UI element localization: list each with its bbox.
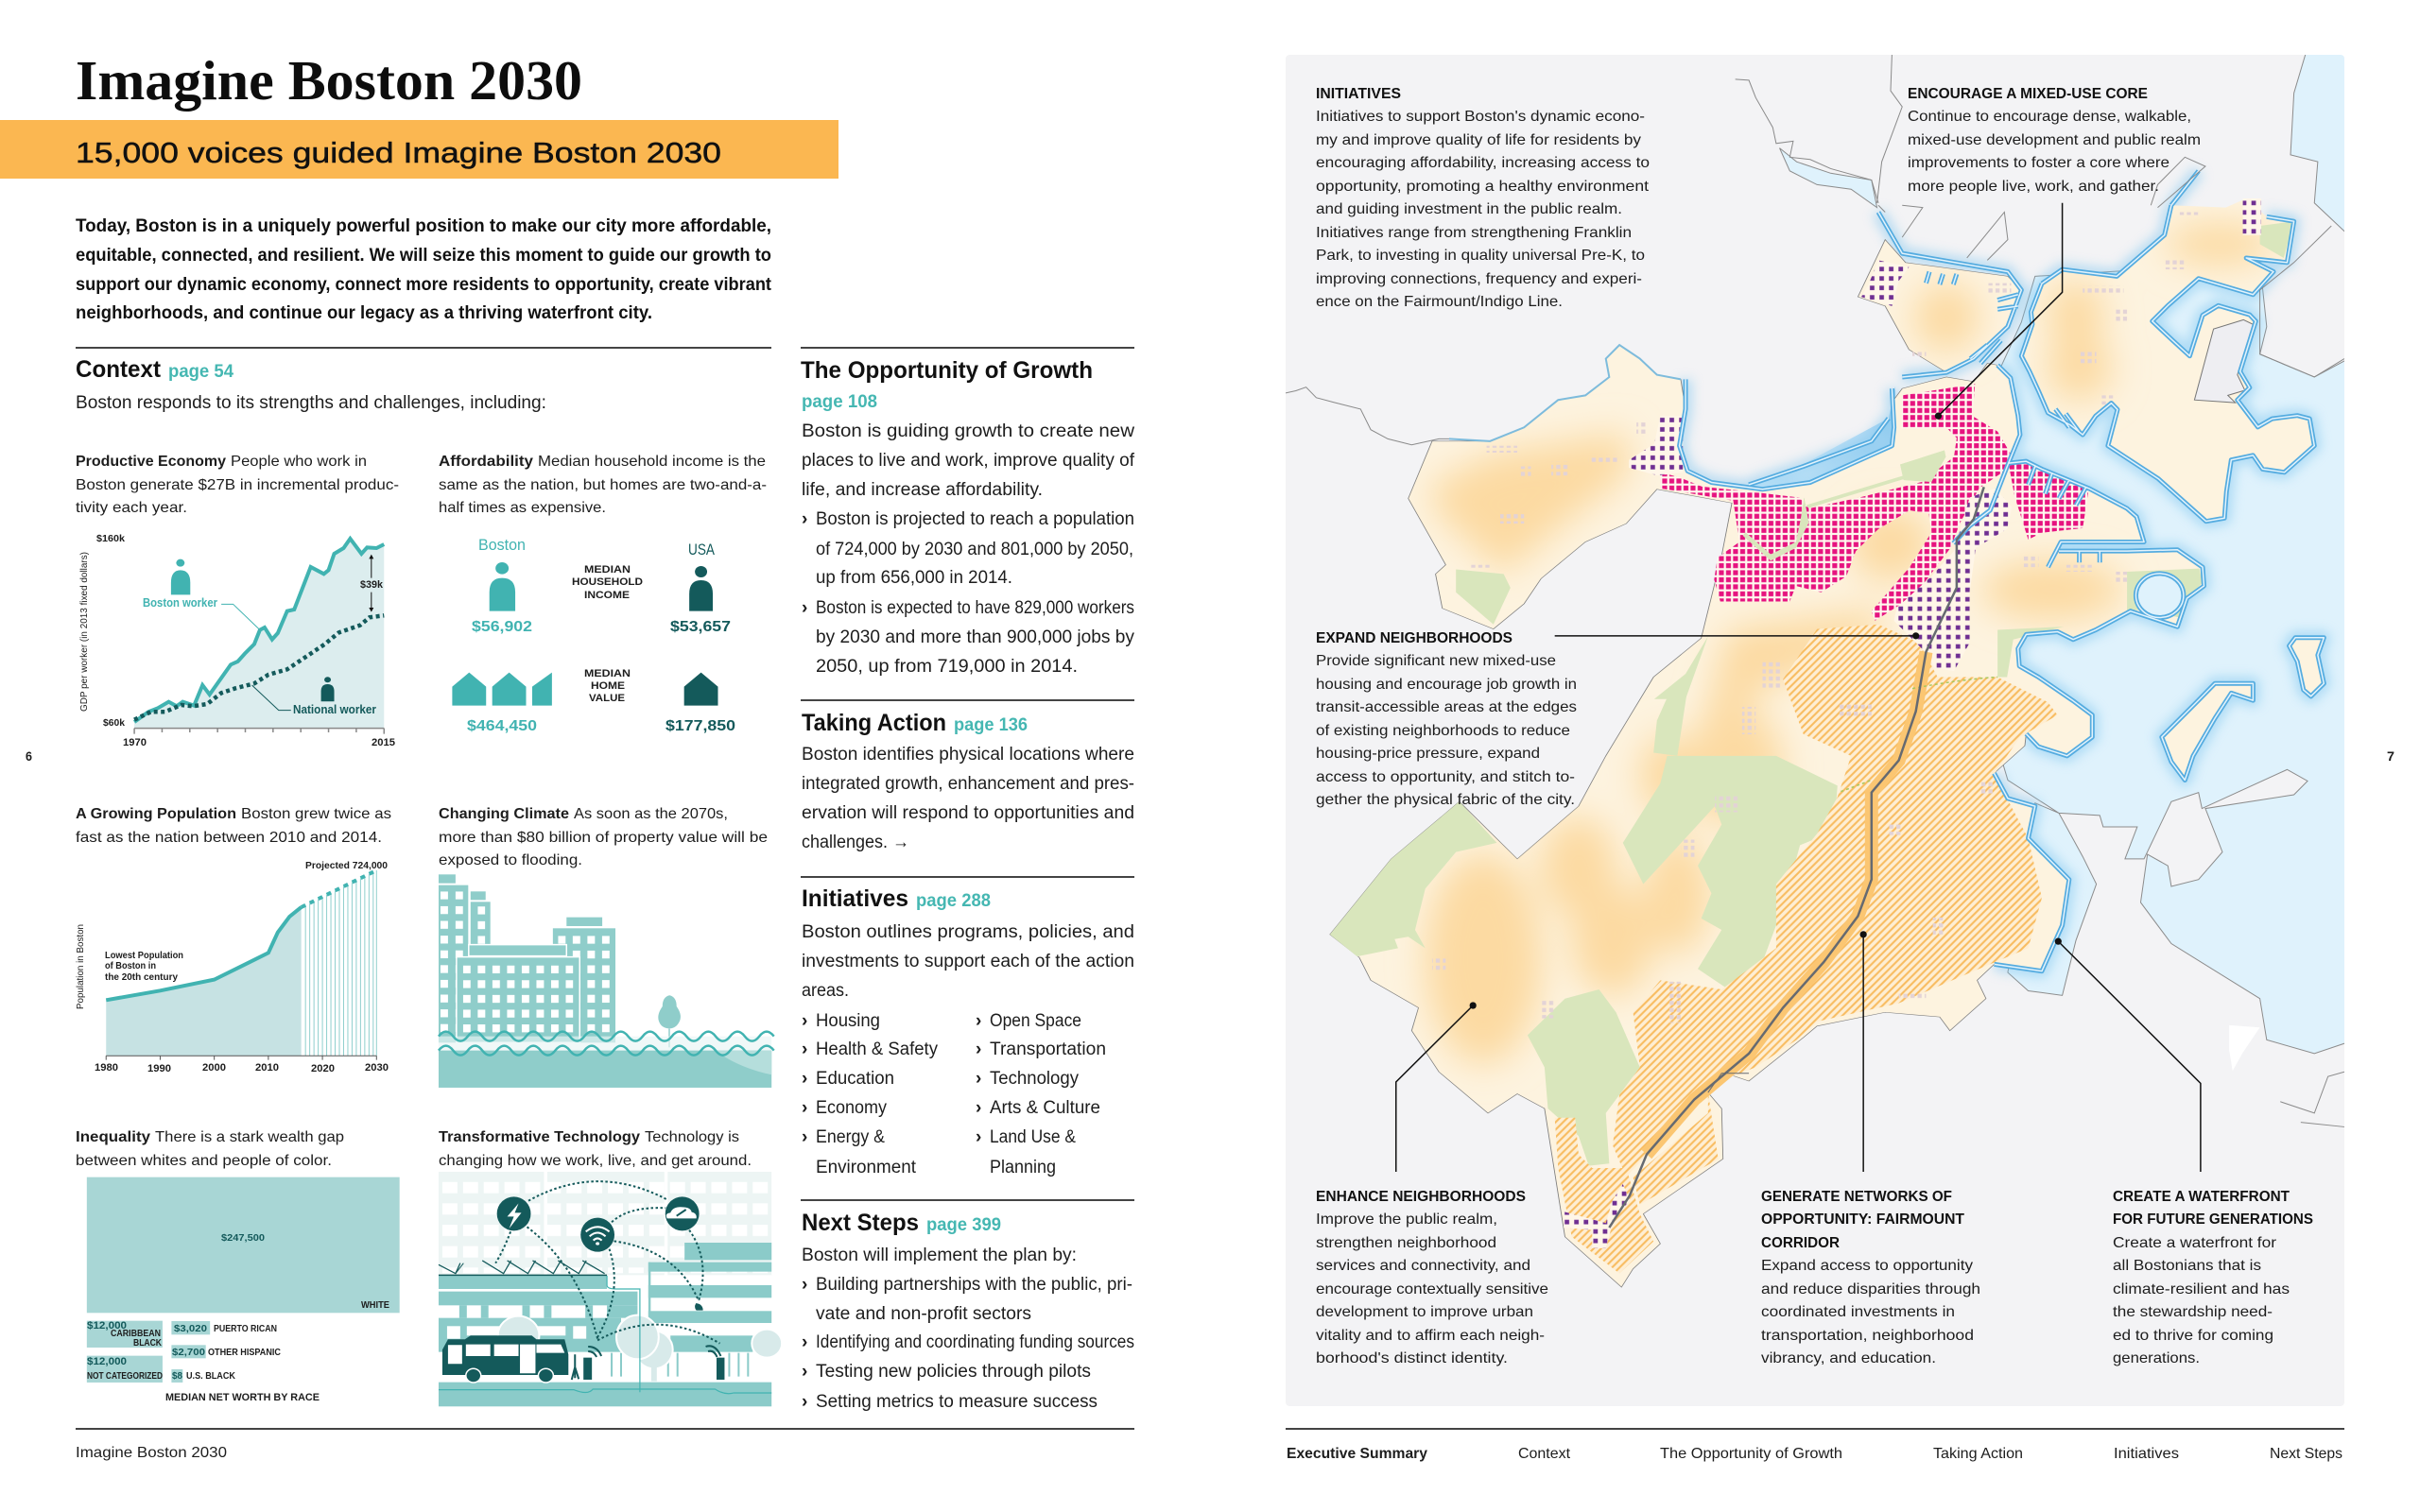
treemap: median net worth by race: WHITE	[361, 1300, 389, 1311]
area chart: population: of Boston in	[105, 961, 156, 971]
column: initiatives: ›	[976, 1011, 981, 1031]
column: initiatives: ›	[976, 1098, 981, 1118]
text: expand neighborhoods: housing and encourage job growth in	[1316, 677, 1577, 693]
text: create a waterfront: the stewardship need-	[2113, 1304, 2273, 1320]
affordability comparison graphic: Boston	[478, 536, 526, 554]
treemap: median net worth by race	[87, 1177, 400, 1403]
footer navigation right: Taking Action	[1933, 1446, 2023, 1462]
column: initiatives	[802, 885, 1134, 1177]
text: changing climate: exposed to flooding.	[439, 852, 582, 868]
column: next steps: ›	[802, 1392, 807, 1412]
column: next steps: vate and non-profit sectors	[816, 1304, 1031, 1324]
column: next steps: ›	[802, 1275, 807, 1295]
column: the opportunity of growth: of 724,000 by 2030 and 801,000 by 2050,	[816, 540, 1133, 559]
text: create a waterfront: climate-resilient and has	[2113, 1281, 2290, 1297]
text: encourage a mixed-use core: mixed-use development and public realm	[1908, 132, 2201, 148]
line chart: GDP per worker: GDP per worker (in 2013 fixed dollars)	[79, 552, 90, 712]
text: affordability	[439, 454, 767, 516]
text: initiatives: Initiatives range from strengthening Franklin	[1316, 225, 1632, 241]
text: growing population: fast as the nation between 2010 and 2014.	[76, 830, 382, 846]
area chart: population: Population in Boston	[76, 924, 86, 1009]
affordability comparison graphic	[452, 536, 735, 734]
text: expand neighborhoods: EXPAND NEIGHBORHOODS	[1316, 630, 1512, 646]
text: expand neighborhoods	[1316, 630, 1577, 808]
footer navigation right	[1286, 1428, 2344, 1462]
affordability comparison graphic: VALUE	[589, 693, 625, 704]
panel: map of Boston	[1286, 54, 2348, 1406]
column: next steps	[802, 1210, 1134, 1412]
text: encourage a mixed-use core	[1908, 86, 2201, 195]
title: Imagine Boston 2030	[76, 49, 582, 112]
callout lines	[1396, 203, 2201, 1172]
column: initiatives: Arts & Culture	[990, 1098, 1100, 1118]
text: generate networks: Expand access to opportunity	[1761, 1258, 1973, 1274]
text: generate networks: and reduce disparities through	[1761, 1281, 1980, 1297]
area chart: population: Projected 724,000	[305, 861, 388, 871]
affordability comparison graphic: MEDIAN	[584, 564, 631, 576]
column: initiatives: ›	[802, 1098, 807, 1118]
column: taking action	[802, 710, 1134, 852]
column: initiatives: Energy &	[816, 1127, 885, 1147]
affordability comparison graphic: $53,657	[670, 619, 731, 635]
text: expand neighborhoods: access to opportunity, and stitch to-	[1316, 769, 1575, 785]
footer navigation right: Next Steps	[2270, 1446, 2342, 1462]
column: taking action: Boston identifies physical locations where	[802, 745, 1134, 765]
column: initiatives: Technology	[990, 1069, 1079, 1089]
text: create a waterfront: ed to thrive for coming	[2113, 1328, 2273, 1344]
column: next steps: page 399	[926, 1215, 1001, 1235]
column: next steps: Building partnerships with the public, pri-	[816, 1275, 1132, 1295]
heading: context: Context	[76, 356, 162, 383]
text: create a waterfront	[2113, 1189, 2313, 1366]
illustration: connected city	[439, 1172, 782, 1406]
text: generate networks: transportation, neighborhood	[1761, 1328, 1974, 1344]
text: inequality	[76, 1129, 344, 1169]
text: expand neighborhoods: transit-accessible areas at the edges	[1316, 699, 1577, 715]
area chart: population: 2020	[311, 1063, 335, 1074]
text: enhance neighborhoods: development to improve urban	[1316, 1304, 1533, 1320]
text: expand neighborhoods: Provide significant new mixed-use	[1316, 653, 1556, 669]
line chart: GDP per worker: $160k	[96, 534, 125, 544]
area chart: population: 2000	[202, 1062, 226, 1074]
column: initiatives: page 288	[916, 891, 991, 911]
text: enhance neighborhoods: ENHANCE NEIGHBORHOODS	[1316, 1189, 1526, 1205]
column: initiatives: ›	[802, 1040, 807, 1059]
text: create a waterfront: FOR FUTURE GENERATIONS	[2113, 1211, 2313, 1228]
column: initiatives: Health & Safety	[816, 1040, 938, 1059]
column: the opportunity of growth: ›	[802, 598, 807, 618]
text: encourage a mixed-use core: Continue to encourage dense, walkable,	[1908, 109, 2191, 125]
line chart: GDP per worker: 1970	[123, 737, 147, 748]
area chart: population: 2010	[255, 1062, 279, 1074]
text: expand neighborhoods: gether the physical fabric of the city.	[1316, 792, 1575, 808]
column: initiatives: areas.	[802, 981, 849, 1001]
text: encourage a mixed-use core: ENCOURAGE A MIXED-USE CORE	[1908, 86, 2148, 102]
column: initiatives: investments to support each of the action	[802, 952, 1134, 971]
treemap: median net worth by race: $8	[172, 1371, 182, 1382]
column: initiatives: ›	[802, 1011, 807, 1031]
text: initiatives: encouraging affordability, increasing access to	[1316, 155, 1650, 171]
area chart: population	[76, 861, 389, 1074]
map artwork	[1286, 54, 2348, 1287]
page number right: 7	[2387, 748, 2394, 764]
text: initiatives: opportunity, promoting a healthy environment	[1316, 179, 1650, 195]
intro paragraph: Today, Boston is in a uniquely powerful position to make our city more affordable,	[76, 215, 771, 236]
line chart: GDP per worker: 2015	[372, 737, 395, 748]
text: initiatives: improving connections, frequency and experi-	[1316, 271, 1642, 287]
treemap: median net worth by race: PUERTO RICAN	[214, 1324, 277, 1334]
footer navigation right: The Opportunity of Growth	[1660, 1446, 1842, 1462]
column: the opportunity of growth	[801, 357, 1135, 677]
line chart: GDP per worker: $39k	[360, 579, 384, 591]
column: next steps: Setting metrics to measure success	[816, 1392, 1098, 1412]
column: taking action: challenges. →	[802, 833, 909, 852]
text: productive economy	[76, 454, 399, 516]
text: generate networks: vibrancy, and education.	[1761, 1350, 1936, 1366]
text: generate networks: OPPORTUNITY: FAIRMOUNT	[1761, 1211, 1964, 1228]
text: affordability: half times as expensive.	[439, 500, 606, 516]
column: next steps: Testing new policies through pilots	[816, 1362, 1091, 1382]
affordability comparison graphic: $177,850	[666, 718, 735, 734]
text: enhance neighborhoods: encourage contextually sensitive	[1316, 1281, 1548, 1297]
text: inequality: between whites and people of color.	[76, 1153, 332, 1169]
treemap: median net worth by race: $12,000	[87, 1356, 127, 1367]
column: initiatives: ›	[976, 1127, 981, 1147]
column: the opportunity of growth: up from 656,000 in 2014.	[816, 568, 1012, 588]
area chart: population: 1990	[147, 1063, 171, 1074]
treemap: median net worth by race: $2,700	[172, 1348, 205, 1358]
text: initiatives: my and improve quality of life for residents by	[1316, 132, 1641, 148]
text: enhance neighborhoods	[1316, 1189, 1548, 1366]
column: initiatives: Economy	[816, 1098, 887, 1118]
text: changing climate: As soon as the 2070s,	[574, 806, 728, 822]
treemap: median net worth by race: CARIBBEAN	[111, 1329, 161, 1339]
intro paragraph: equitable, connected, and resilient. We will seize this moment to guide our growth to	[76, 245, 771, 266]
text: inequality: Inequality	[76, 1129, 150, 1145]
line chart: GDP per worker	[79, 534, 395, 748]
column: taking action: ervation will respond to opportunities and	[802, 803, 1134, 823]
column: taking action: page 136	[954, 715, 1028, 735]
page number left: 6	[26, 748, 32, 764]
intro paragraph	[76, 215, 771, 323]
illustration: flooding buildings	[439, 874, 774, 1088]
column: next steps: Identifying and coordinating funding sources	[816, 1332, 1134, 1352]
area chart: population: Lowest Population	[105, 951, 183, 961]
column: next steps: ›	[802, 1362, 807, 1382]
column: initiatives: Transportation	[990, 1040, 1106, 1059]
footer left: Imagine Boston 2030	[76, 1445, 227, 1461]
column: the opportunity of growth: Boston is projected to reach a population	[816, 509, 1134, 529]
text: generate networks: CORRIDOR	[1761, 1235, 1840, 1251]
column: the opportunity of growth: ›	[802, 509, 807, 529]
column: next steps: Boston will implement the plan by:	[802, 1246, 1077, 1265]
text: transformative technology: Transformative Technology	[439, 1129, 640, 1145]
treemap: median net worth by race: MEDIAN NET WORTH BY RACE	[165, 1392, 320, 1403]
affordability comparison graphic: HOME	[591, 680, 625, 692]
text: changing climate	[439, 806, 768, 868]
column: initiatives: Land Use &	[990, 1127, 1076, 1147]
line chart: GDP per worker: National worker	[293, 702, 376, 716]
text: generate networks: GENERATE NETWORKS OF	[1761, 1189, 1952, 1205]
column: initiatives: ›	[976, 1040, 981, 1059]
heading: context: page 54	[168, 362, 233, 382]
text: generate networks: coordinated investments in	[1761, 1304, 1955, 1320]
text: growing population: A Growing Population	[76, 806, 236, 822]
heading: context: Boston responds to its strengths and challenges, including:	[76, 393, 546, 413]
text: initiatives: Initiatives to support Boston's dynamic econo-	[1316, 109, 1645, 125]
line chart: GDP per worker: Boston worker	[143, 595, 217, 610]
text: encourage a mixed-use core: more people live, work, and gather.	[1908, 179, 2159, 195]
text: changing climate: more than $80 billion of property value will be	[439, 830, 768, 846]
affordability comparison graphic: MEDIAN	[584, 668, 631, 679]
treemap: median net worth by race: U.S. BLACK	[186, 1371, 236, 1382]
treemap: median net worth by race: OTHER HISPANIC	[208, 1348, 281, 1358]
text: productive economy: People who work in	[231, 454, 367, 470]
affordability comparison graphic: $464,450	[467, 718, 537, 734]
text: expand neighborhoods: of existing neighborhoods to reduce	[1316, 723, 1570, 739]
text: enhance neighborhoods: strengthen neighborhood	[1316, 1235, 1496, 1251]
area chart: population: the 20th century	[105, 972, 178, 983]
footer navigation right: Initiatives	[2114, 1446, 2179, 1462]
treemap: median net worth by race: $12,000	[87, 1320, 127, 1332]
treemap: median net worth by race: BLACK	[133, 1338, 163, 1349]
intro paragraph: support our dynamic economy, connect more residents to opportunity, create vibrant	[76, 274, 771, 295]
column: next steps: Next Steps	[802, 1210, 919, 1236]
text: productive economy: tivity each year.	[76, 500, 187, 516]
text: inequality: There is a stark wealth gap	[155, 1129, 344, 1145]
text: affordability: Affordability	[439, 454, 533, 470]
subtitle banner	[0, 120, 838, 179]
column: initiatives: Initiatives	[802, 885, 908, 912]
treemap: median net worth by race: $247,500	[221, 1233, 265, 1244]
column: the opportunity of growth: places to live and work, improve quality of	[802, 451, 1135, 471]
text: productive economy: Boston generate $27B in incremental produc-	[76, 477, 399, 493]
text: generate networks	[1761, 1189, 1980, 1366]
column: initiatives: Boston outlines programs, policies, and	[802, 922, 1134, 942]
text: transformative technology	[439, 1129, 752, 1169]
text: growing population	[76, 806, 391, 846]
text: affordability: Median household income is the	[538, 454, 766, 470]
treemap: median net worth by race: $3,020	[174, 1324, 207, 1334]
column: the opportunity of growth: Boston is guiding growth to create new	[802, 421, 1134, 441]
text: initiatives: ence on the Fairmount/Indigo Line.	[1316, 294, 1563, 310]
area chart: population: 1980	[95, 1062, 118, 1074]
text: enhance neighborhoods: vitality and to affirm each neigh-	[1316, 1328, 1545, 1344]
text: enhance neighborhoods: Improve the public realm,	[1316, 1211, 1497, 1228]
column: the opportunity of growth: by 2030 and more than 900,000 jobs by	[816, 627, 1135, 647]
column: initiatives: ›	[802, 1127, 807, 1147]
column: initiatives: ›	[802, 1069, 807, 1089]
footer navigation right: Executive Summary	[1287, 1446, 1427, 1462]
text: productive economy: Productive Economy	[76, 454, 226, 470]
column: initiatives: Housing	[816, 1011, 880, 1031]
affordability comparison graphic: INCOME	[584, 590, 630, 601]
text: expand neighborhoods: housing-price pressure, expand	[1316, 746, 1540, 762]
text: initiatives: Park, to investing in quality universal Pre-K, to	[1316, 248, 1645, 264]
affordability comparison graphic: USA	[688, 541, 716, 558]
column: the opportunity of growth: 2050, up from 719,000 in 2014.	[816, 657, 1078, 677]
text: create a waterfront: generations.	[2113, 1350, 2200, 1366]
heading: context	[76, 356, 546, 413]
intro paragraph: neighborhoods, and continue our legacy as a thriving waterfront city.	[76, 302, 652, 323]
text: initiatives	[1316, 86, 1650, 310]
text: changing climate: Changing Climate	[439, 806, 569, 822]
affordability comparison graphic: $56,902	[472, 619, 532, 635]
column: initiatives: Education	[816, 1069, 894, 1089]
text: affordability: same as the nation, but homes are two-and-a-	[439, 477, 767, 493]
text: encourage a mixed-use core: improvements to foster a core where	[1908, 155, 2169, 171]
text: create a waterfront: all Bostonians that is	[2113, 1258, 2261, 1274]
column: next steps: ›	[802, 1332, 807, 1352]
text: create a waterfront: Create a waterfront for	[2113, 1235, 2277, 1251]
text: enhance neighborhoods: services and connectivity, and	[1316, 1258, 1530, 1274]
text: initiatives: and guiding investment in the public realm.	[1316, 201, 1622, 217]
column: the opportunity of growth: page 108	[802, 392, 877, 412]
footer navigation right: Context	[1518, 1446, 1571, 1462]
text: create a waterfront: CREATE A WATERFRONT	[2113, 1189, 2290, 1205]
column: the opportunity of growth: Boston is expected to have 829,000 workers	[816, 598, 1134, 618]
column: initiatives: Open Space	[990, 1011, 1081, 1031]
column: initiatives: Environment	[816, 1158, 917, 1177]
column: initiatives: ›	[976, 1069, 981, 1089]
treemap: median net worth by race: NOT CATEGORIZED	[87, 1371, 163, 1382]
text: transformative technology: Technology is	[645, 1129, 739, 1145]
area chart: population: 2030	[365, 1062, 389, 1074]
text: initiatives: INITIATIVES	[1316, 86, 1401, 102]
column: taking action: integrated growth, enhancement and pres-	[802, 774, 1134, 794]
subtitle banner: 15,000 voices guided Imagine Boston 2030	[76, 136, 721, 169]
text: enhance neighborhoods: borhood's distinct identity.	[1316, 1350, 1508, 1366]
column: the opportunity of growth: life, and increase affordability.	[802, 480, 1043, 500]
text: transformative technology: changing how we work, live, and get around.	[439, 1153, 752, 1169]
affordability comparison graphic: HOUSEHOLD	[572, 576, 643, 588]
line chart: GDP per worker: $60k	[103, 718, 125, 729]
text: growing population: Boston grew twice as	[241, 806, 391, 822]
column: the opportunity of growth: The Opportunity of Growth	[801, 357, 1093, 384]
column: initiatives: Planning	[990, 1158, 1056, 1177]
column: taking action: Taking Action	[802, 710, 946, 736]
